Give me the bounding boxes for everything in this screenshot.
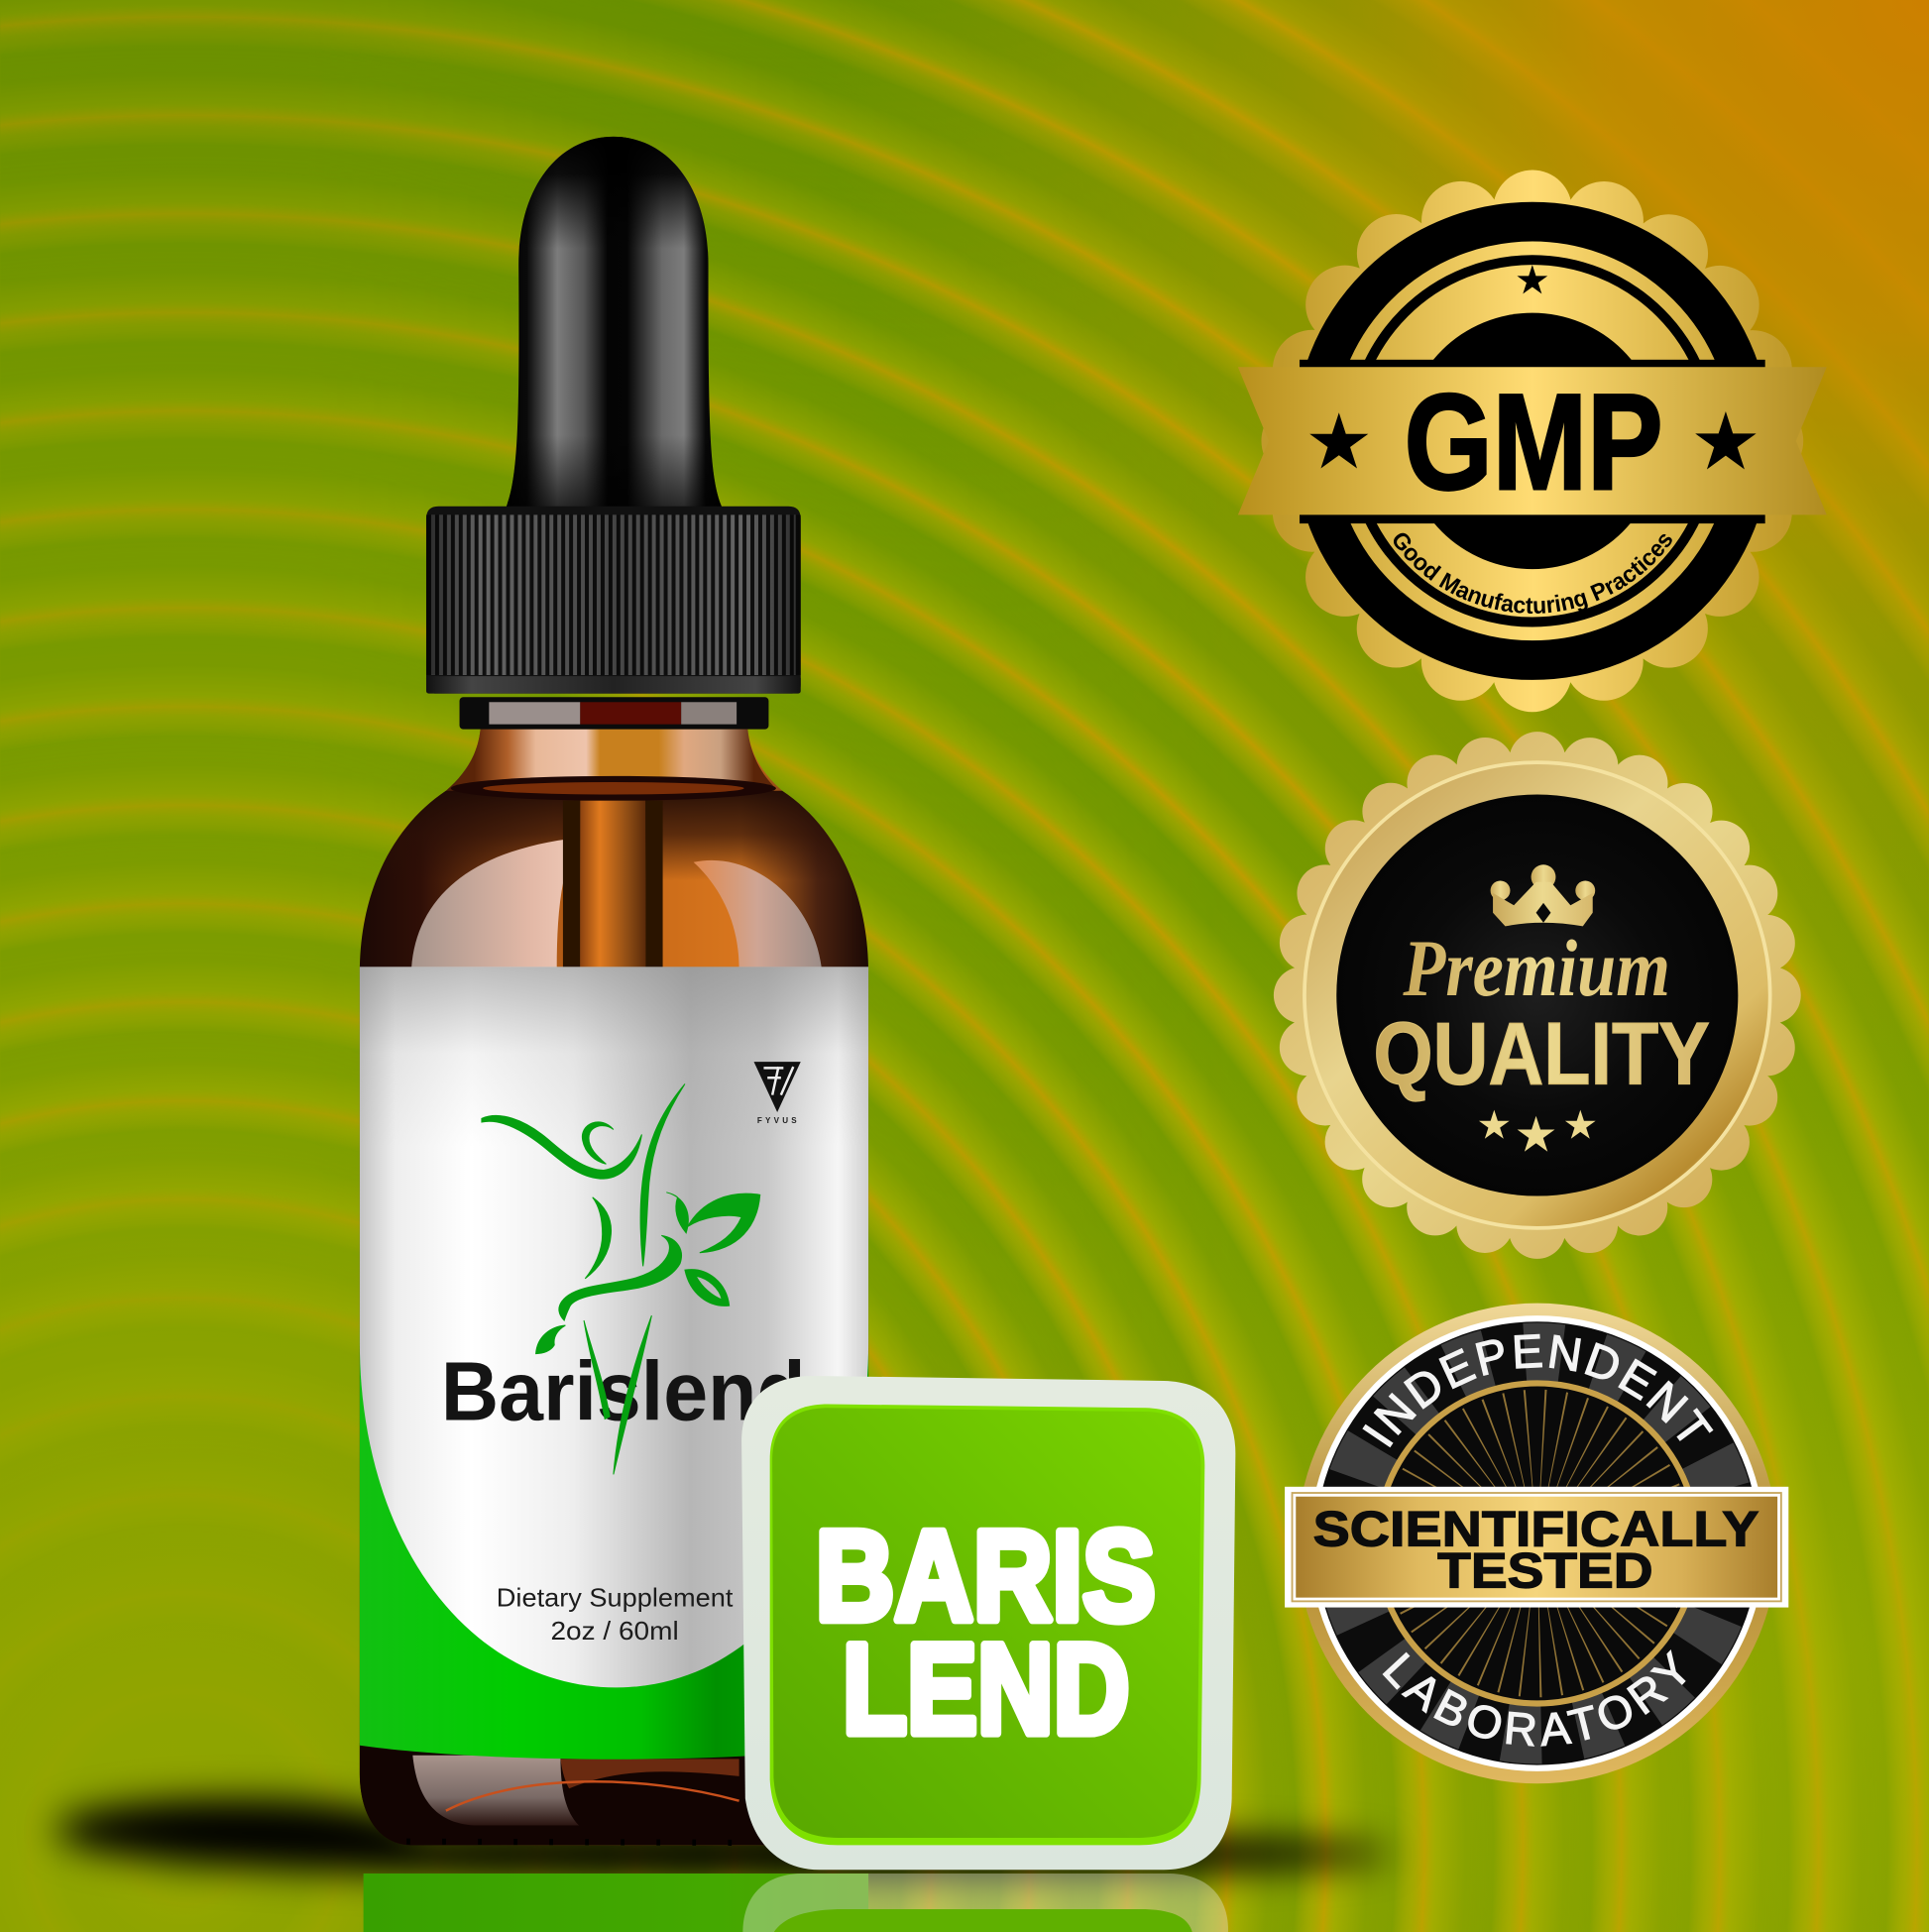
product: green square box xyxy=(741,1376,1235,1870)
curved caption: Good Manufacturing Practices xyxy=(1394,533,1672,614)
badge: GMP xyxy=(1238,170,1827,712)
rubber dropper bulb xyxy=(506,137,723,510)
banner text line 1: SCIENTIFICALLY xyxy=(1313,1501,1759,1556)
ribbed black cap xyxy=(426,507,801,694)
glass body xyxy=(360,730,868,1845)
arc text: laboratory: LABORATORY xyxy=(1382,1649,1686,1747)
QUALITY word: QUALITY xyxy=(1374,1003,1710,1102)
sun rays xyxy=(1445,1451,1630,1636)
three stars xyxy=(1479,1110,1596,1152)
scalloped seal xyxy=(1295,752,1780,1238)
banner text line 2: TESTED xyxy=(1437,1543,1653,1599)
box text: BARIS xyxy=(816,1505,1156,1648)
neck collar xyxy=(460,697,768,730)
brand logo: FYVUS: FYVUS xyxy=(757,1116,800,1125)
GMP heading: GMP xyxy=(1405,366,1663,518)
ground shadow xyxy=(56,1798,1392,1878)
badge: premium quality xyxy=(1295,752,1780,1238)
product name: Barislend xyxy=(441,1345,806,1438)
label text: dietary supplement: Dietary Supplement xyxy=(497,1582,734,1612)
arc text: independent: INDEPENDENT xyxy=(1362,1334,1713,1447)
label text: volume: 2oz / 60ml xyxy=(550,1616,679,1646)
badge: scientifically tested xyxy=(1285,1303,1788,1784)
paper label xyxy=(360,966,868,1760)
product: dropper bottle xyxy=(360,137,868,1845)
seal xyxy=(1291,199,1773,682)
crown xyxy=(1491,864,1595,926)
ribbon stars xyxy=(1309,411,1757,469)
box text: LEND xyxy=(843,1618,1130,1761)
floor reflection xyxy=(364,1874,1228,1932)
base glass xyxy=(360,1743,868,1845)
green dancer and leaf logo xyxy=(482,1083,760,1474)
gold ribbon xyxy=(1238,367,1827,514)
gold banner xyxy=(1285,1487,1788,1608)
brand logo: FYVUS xyxy=(754,1062,801,1125)
box text xyxy=(816,1505,1156,1761)
script word: Premium xyxy=(1403,923,1670,1013)
